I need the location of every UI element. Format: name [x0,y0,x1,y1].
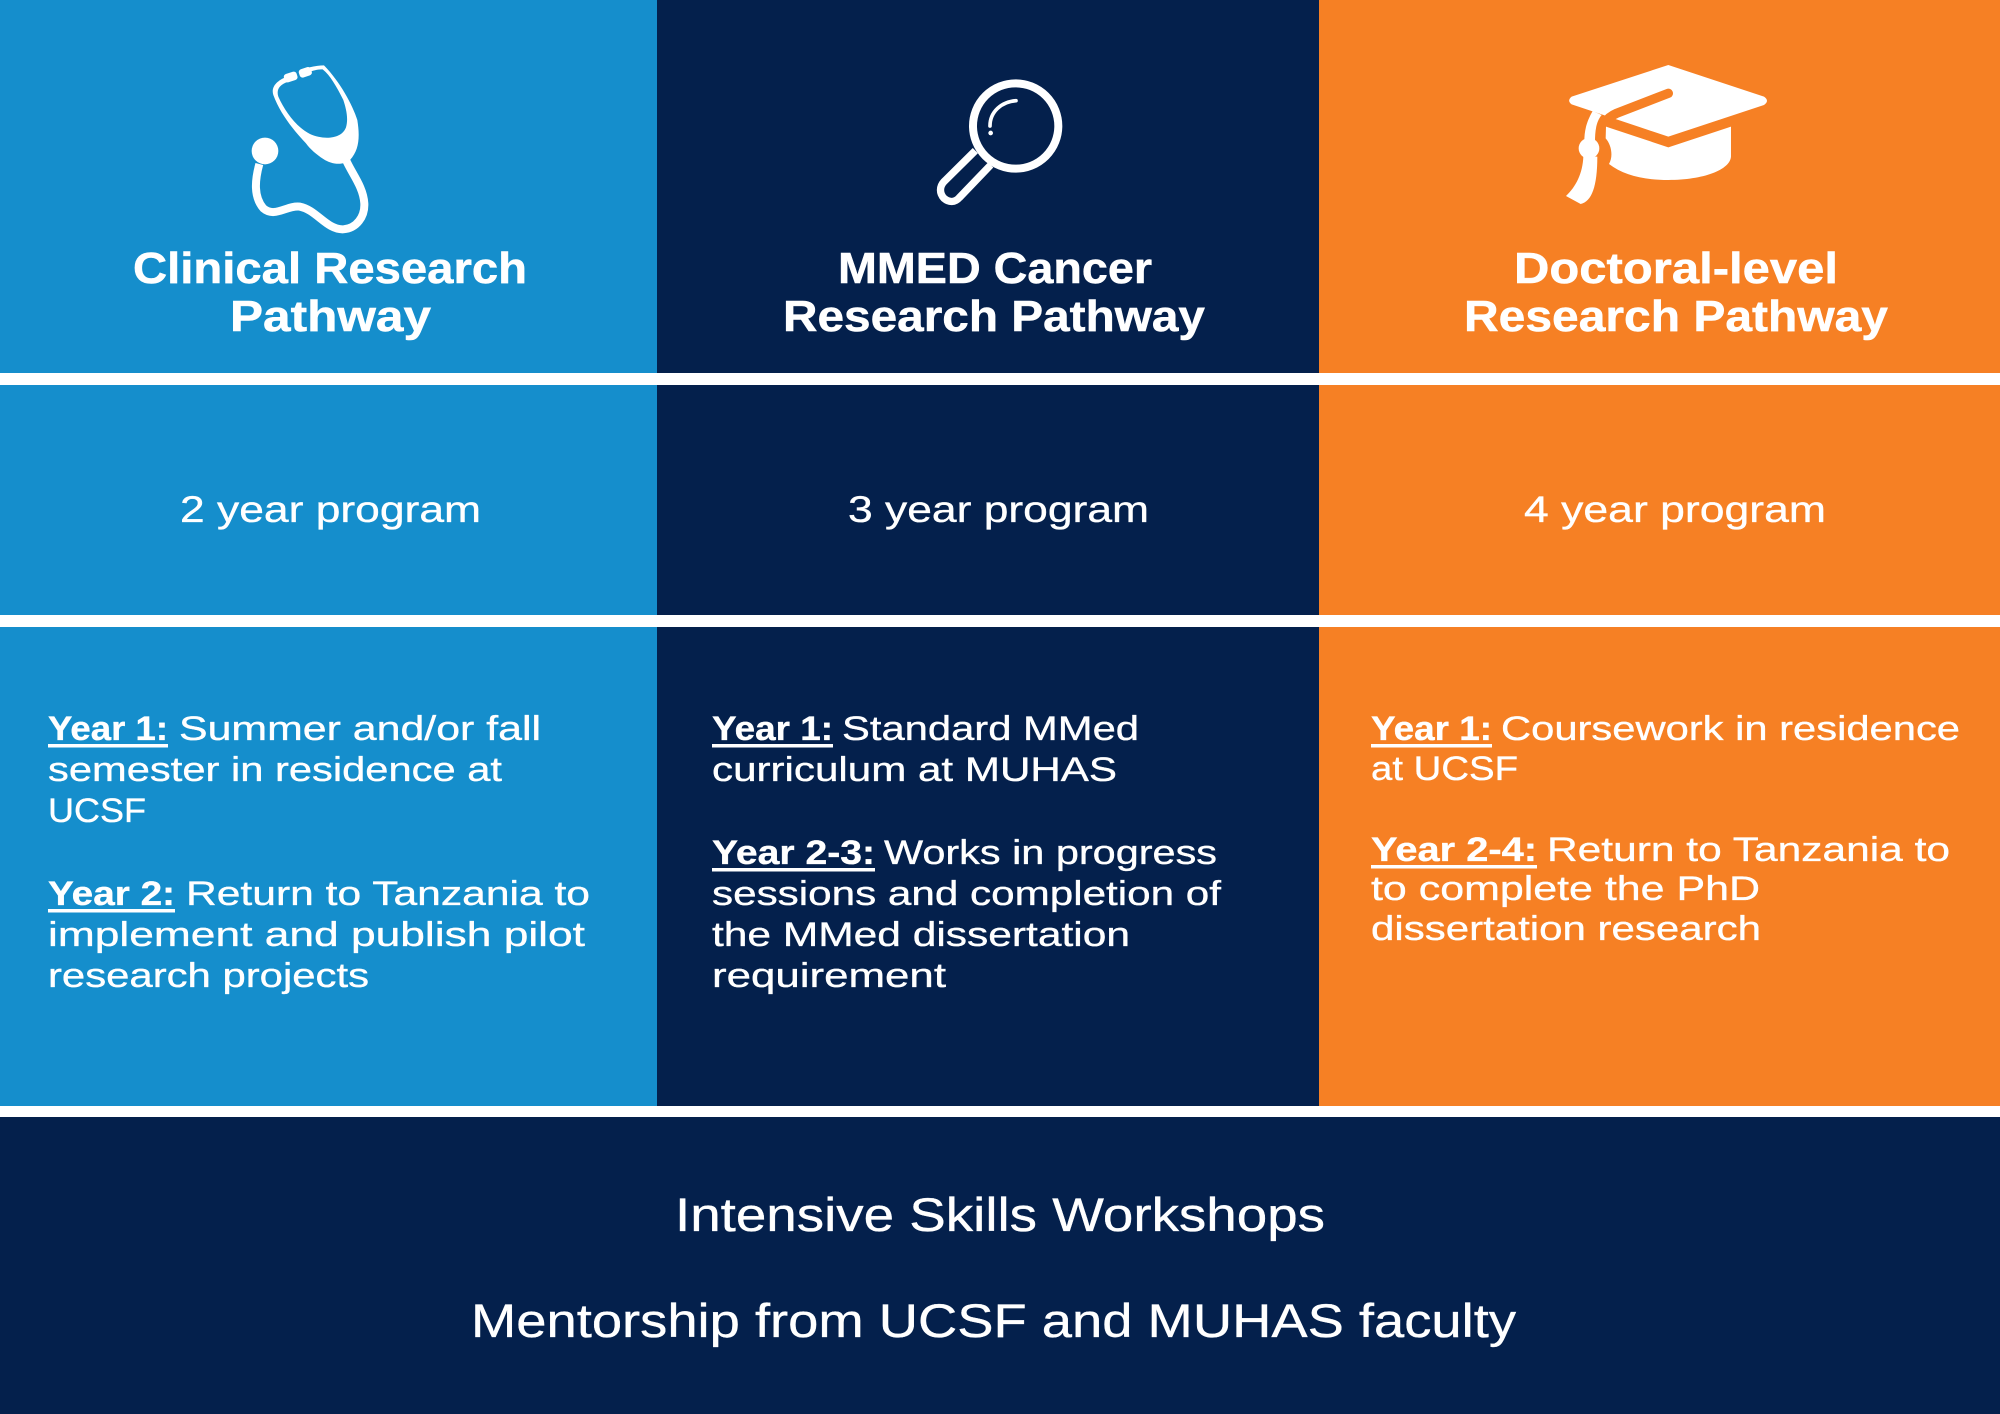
panel: doctoral details [1319,627,2000,1106]
heading: mmed cancer research pathway [783,244,1206,341]
text: mmed year 2-3: sessions and completion of [712,875,1222,913]
heading: clinical research pathway: Pathway [230,292,432,341]
panel: mmed cancer details [657,627,1319,1106]
icon: magnifying glass [940,83,1058,201]
heading: mmed cancer research pathway: Research Pathway [783,292,1206,341]
text: mmed year 2-3: requirement [712,957,947,995]
heading: doctoral-level research pathway: Doctoral-level [1514,244,1838,293]
text: mmed year 2-3: Works in progress [884,834,1217,872]
text: clinical year 2: research projects [48,957,369,995]
text: doctoral year 1: at UCSF [1371,750,1518,788]
text: clinical year 1: Summer and/or fall [179,710,541,748]
text: mmed year 1 [712,710,1139,789]
panel: doctoral-level research pathway header [1319,0,2000,373]
text: intensive skills workshops: Intensive Skills Workshops [675,1188,1325,1241]
text: doctoral year 2-4: dissertation research [1371,910,1761,948]
heading: mmed cancer research pathway: MMED Cancer [838,244,1152,293]
panel: 3 year program: 3 year program [848,489,1149,530]
text: doctoral year 2-4 [1371,831,1950,948]
panel: 3 year program [657,385,1319,615]
heading: doctoral-level research pathway: Research Pathway [1464,292,1889,341]
heading: doctoral-level research pathway [1464,244,1889,341]
panel: mmed cancer research pathway header [657,0,1319,373]
text: doctoral year 1: Year 1: [1371,710,1492,748]
panel: 2 year program [0,385,657,615]
text: clinical year 2: Year 2: [48,875,175,913]
heading: clinical research pathway: Clinical Research [133,244,527,293]
panel: shared program components [0,1117,2000,1414]
text: clinical year 2 [48,875,590,995]
text: clinical year 1: UCSF [48,792,146,830]
text: mmed year 2-3 [712,834,1222,995]
text: doctoral year 2-4: to complete the PhD [1371,870,1760,908]
panel: clinical research pathway header [0,0,657,373]
text: clinical year 1: Year 1: [48,710,168,748]
text: mmed year 1: curriculum at MUHAS [712,751,1117,789]
heading: clinical research pathway [133,244,527,341]
icon: graduation cap [1566,65,1767,204]
panel: clinical research details [0,627,657,1106]
text: doctoral year 2-4: Year 2-4: [1371,831,1537,869]
text: mmed year 2-3: Year 2-3: [712,834,875,872]
text: clinical year 2: Return to Tanzania to [186,875,590,913]
panel: 4 year program [1319,385,2000,615]
text: clinical year 2: implement and publish pilot [48,916,586,954]
text: mmed year 2-3: the MMed dissertation [712,916,1130,954]
icon: stethoscope [252,65,364,229]
text: mmed year 1: Year 1: [712,710,833,748]
text: doctoral year 2-4: Return to Tanzania to [1547,831,1950,869]
text: mmed year 1: Standard MMed [842,710,1139,748]
panel: 4 year program: 4 year program [1524,489,1826,530]
text: mentorship: Mentorship from UCSF and MUHAS faculty [471,1294,1517,1347]
text: clinical year 1: semester in residence at [48,751,503,789]
panel: 2 year program: 2 year program [180,489,481,530]
text: doctoral year 1 [1371,710,1960,788]
text: doctoral year 1: Coursework in residence [1501,710,1960,748]
text: clinical year 1 [48,710,541,830]
